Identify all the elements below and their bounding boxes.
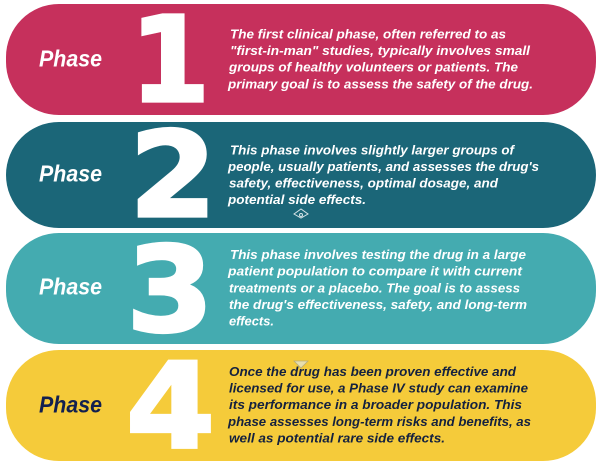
- text block: phase 1 description: primary goal is to assess the safety of the drug.: [227, 76, 533, 91]
- panel: phase 1: [6, 0, 596, 129]
- text block: phase 4 description: Once the drug has been proven effective and: [229, 364, 517, 379]
- text block: phase 4 description: licensed for use, a Phase IV study can examine: [229, 380, 528, 396]
- text block: phase 4 description: [227, 364, 531, 445]
- text block: phase 3 description: patient population to compare it with current: [227, 264, 523, 279]
- text block: phase 2 description: safety, effectiveness, optimal dosage, and: [229, 176, 499, 190]
- text block: phase 1 description: [227, 26, 533, 91]
- text block: phase 2 description: This phase involves slightly larger groups of: [230, 142, 516, 158]
- text block: phase 3 description: the drug's effectiveness, safety, and long-term: [229, 297, 527, 312]
- text block: phase 1 description: "first-in-man" studies, typically involves small: [230, 43, 530, 58]
- text block: phase 4 description: well as potential rare side effects.: [229, 430, 445, 445]
- heading: phase 3 label: Phase: [39, 274, 102, 300]
- text block: phase 2 description: people, usually patients, and assesses the drug's: [227, 159, 539, 174]
- heading: phase 4 label: Phase: [39, 391, 102, 417]
- text block: phase 4 description: phase assesses long-term risks and benefits, as: [227, 414, 531, 429]
- text block: phase 1 description: The first clinical phase, often referred to as: [230, 26, 506, 42]
- heading: phase 2 label: Phase: [39, 161, 102, 187]
- heading: phase 1 label: Phase: [39, 46, 102, 72]
- icon: small diamond marker: [294, 209, 308, 218]
- text block: phase 2 description: [227, 142, 539, 207]
- text block: phase 1 description: groups of healthy volunteers or patients. The: [228, 60, 518, 75]
- panel: phase 4: [6, 337, 596, 466]
- panel: phase 2: [6, 106, 596, 244]
- icon: small star marker: [294, 361, 308, 368]
- text block: phase 4 description: its performance in a broader population. This: [229, 397, 522, 412]
- text block: phase 3 description: This phase involves testing the drug in a large: [230, 247, 526, 262]
- panel: phase 3: [6, 221, 596, 359]
- text block: phase 3 description: [227, 247, 527, 328]
- text block: phase 3 description: effects.: [229, 314, 274, 328]
- text block: phase 2 description: potential side effects.: [227, 192, 366, 207]
- numeral 2: 2: [130, 106, 216, 244]
- text block: phase 3 description: treatments or a placebo. The goal is to assess: [229, 280, 520, 295]
- numeral 3: 3: [126, 221, 214, 359]
